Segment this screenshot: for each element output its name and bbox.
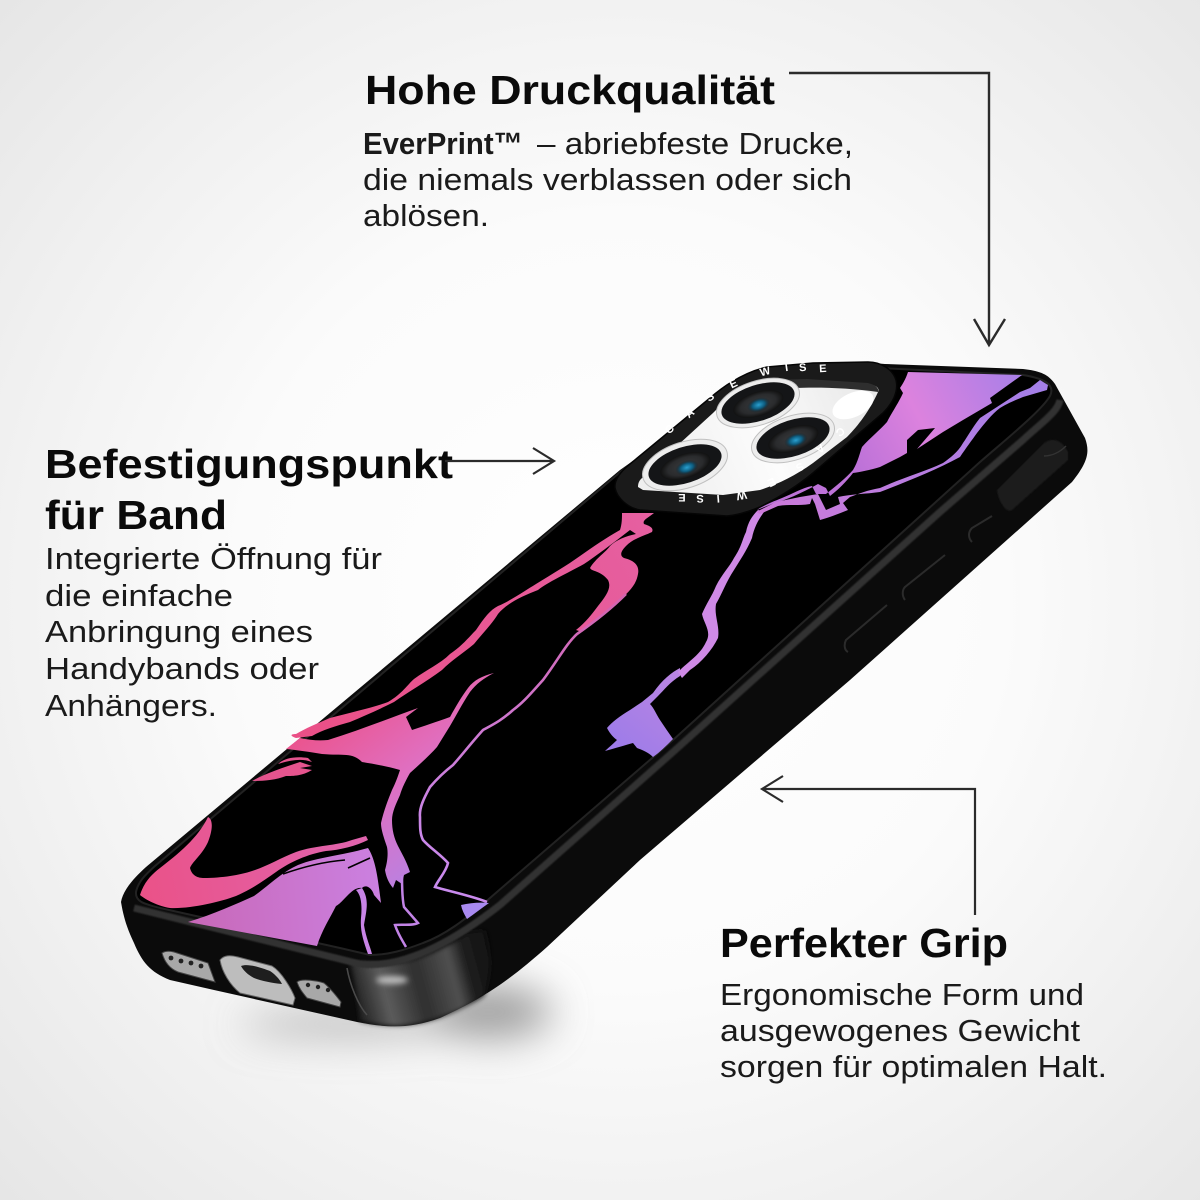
marble: pink swirl [252,757,312,781]
left speaker [162,951,215,982]
strap slot [997,440,1068,511]
lens: right [745,404,841,472]
marble: black streaks [283,846,372,874]
right speaker [297,980,341,1007]
text: grip: sorgen für optimalen Halt. [720,1049,1107,1084]
text: strap mount: Anbringung eines [45,614,313,649]
ring lettering: E [678,491,686,503]
camera plate shade [770,379,878,392]
heading: print quality: Hohe Druckqualität [365,67,775,113]
volume up button [903,555,945,600]
ring lettering: I [784,362,789,374]
ring lettering: S [793,460,806,474]
ring lettering: S [696,492,704,504]
ring lettering: E [819,363,827,375]
marble: lower purple [188,848,381,946]
marble: long pink streak [292,513,654,738]
small button [969,516,992,542]
text: strap mount: Integrierte Öffnung für [45,541,382,576]
ring lettering: E [728,377,740,391]
marble: violet line up [678,510,764,678]
marble: center thin drip lower [356,888,372,954]
marble: top right stripe [756,380,1048,520]
marble: lower thin curl [395,876,418,947]
text: strap mount: die einfache [45,578,233,613]
back plate [136,368,1051,955]
text: print quality: ablösen. [363,198,489,233]
volume down button [845,605,887,652]
marble: lower left pink [140,817,368,908]
lens: left [636,430,734,500]
text: grip [720,977,1107,1084]
heading: strap mount [45,441,453,538]
phone case [121,362,1087,1026]
marble: thin center line [420,594,626,902]
ring lettering: E [765,475,777,489]
marble: violet blob [605,668,680,757]
ring lettering: W [759,365,772,379]
ring lettering: A [683,406,697,421]
side buttons [845,516,992,652]
phone shadow [240,986,552,1038]
callout: grip [720,920,1107,1084]
arrow: print quality [789,73,1005,345]
marble: top right large [757,372,1022,510]
text: strap mount: Anhängers. [45,688,217,723]
text: print quality [363,126,853,233]
callout: strap mount [45,441,453,723]
camera ring [615,362,897,516]
text: grip: Ergonomische Form und [720,977,1084,1012]
camera plate [638,380,879,495]
marble: small violet [461,903,489,919]
arrow: strap mount [445,448,554,474]
ring lettering: A [813,441,827,456]
charging port [220,956,295,1005]
ring lettering [663,362,847,504]
text: strap mount [45,541,382,723]
gloss seam [347,968,367,1015]
heading: strap mount: für Band [45,492,227,538]
camera plate highlight [828,385,878,425]
text: strap mount: Handybands oder [45,651,319,686]
ring lettering: I [716,492,720,504]
ring lettering: C [663,423,677,437]
case body [121,363,1087,1026]
ring lettering: C [833,424,847,438]
text: grip: ausgewogenes Gewicht [720,1013,1080,1048]
heading: strap mount: Befestigungspunkt [45,441,453,487]
text: print quality: EverPrint™ [363,126,523,161]
ring lettering: S [799,362,807,374]
text: print quality: – abriebfeste Drucke, [537,126,853,161]
ring lettering: W [735,488,748,502]
lens: top [710,369,806,437]
ring lettering: S [704,390,717,404]
gloss highlight [376,976,408,984]
heading: grip: Perfekter Grip [720,920,1008,966]
arrow: grip [762,776,975,915]
callout: print quality [363,67,853,233]
side gloss [350,930,490,1026]
text: print quality: die niemals verblassen oder sich [363,162,852,197]
side rim highlight [134,400,1060,965]
marble: center pink [286,673,494,888]
